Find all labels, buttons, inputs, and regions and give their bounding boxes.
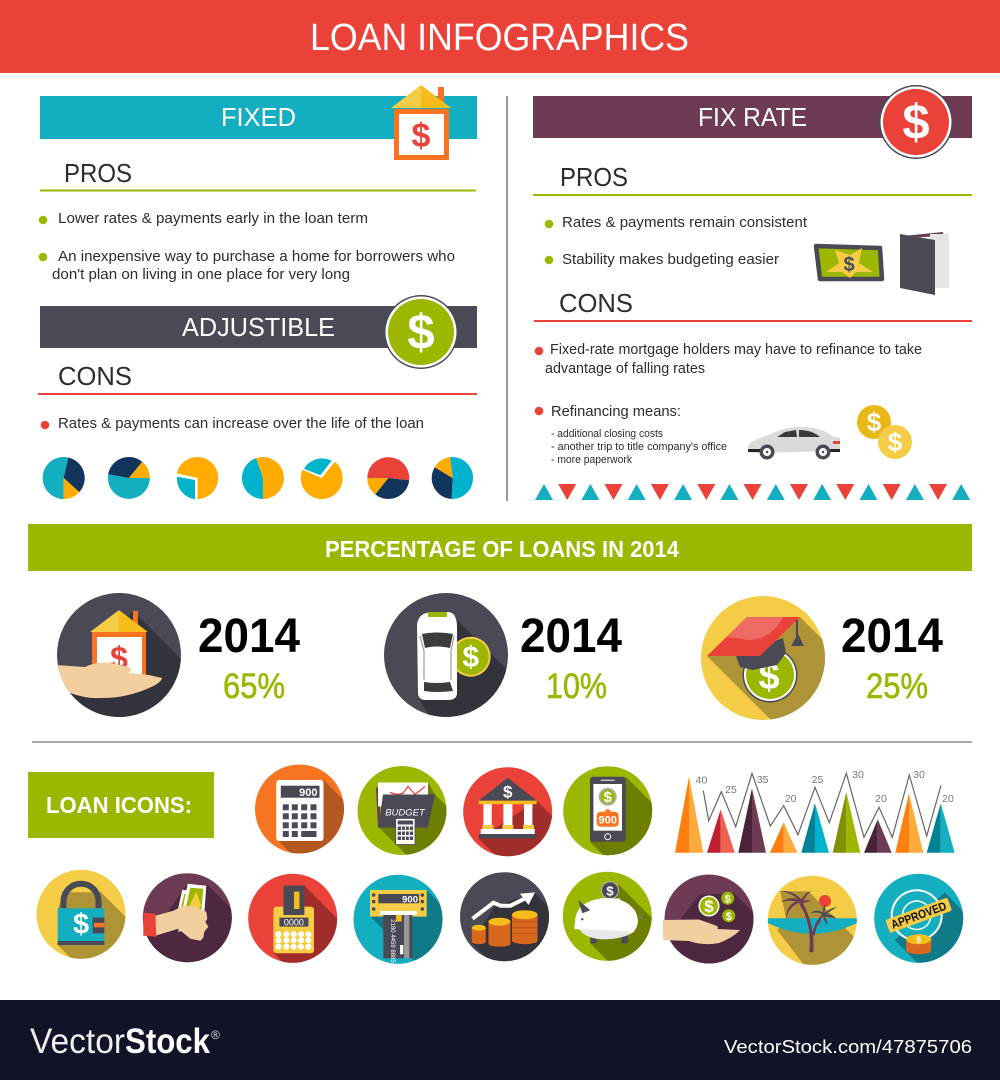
icon: banknote xyxy=(816,246,882,279)
heading: cons: CONS xyxy=(559,288,633,318)
stat: home loans xyxy=(57,593,300,717)
list: refinancing items: - additional closing costs xyxy=(551,428,663,440)
icon: green dollar coin: $ xyxy=(407,306,435,360)
pie 3 xyxy=(177,457,218,499)
list: fix rate pros: Rates & payments remain consistent xyxy=(562,214,808,231)
pie 5 xyxy=(301,458,343,499)
list: fixed pros xyxy=(39,210,455,283)
icon: card calculator xyxy=(248,874,338,963)
icon: green dollar coin xyxy=(384,295,458,369)
footer: watermark bar: Stock xyxy=(125,1022,210,1061)
list: refinancing items xyxy=(551,428,727,466)
triangle bunting xyxy=(535,484,970,500)
stat: car loans xyxy=(384,593,622,730)
icon: bank: $ xyxy=(503,783,513,802)
heading: fix rate: FIX RATE xyxy=(698,102,807,132)
icon: house in hand xyxy=(57,593,181,717)
icon: hand with coins: $ xyxy=(725,894,731,906)
chart: triangle peaks with line: 20 xyxy=(942,793,954,805)
heading: fixed: FIXED xyxy=(221,102,296,132)
panel: fixed xyxy=(39,85,477,283)
list: adjustible cons: Rates & payments can increase over the life of the loan xyxy=(58,415,424,432)
icon: red dollar coin xyxy=(879,85,953,159)
stat text: 65% xyxy=(223,667,285,706)
chart: triangle peaks with line: 30 xyxy=(852,769,864,781)
pie 6 xyxy=(367,457,409,499)
list: fixed pros: don't plan on living in one place for very long xyxy=(52,266,350,283)
icon: house in hand: $ xyxy=(110,640,128,676)
chart: triangle peaks with line: 25 xyxy=(812,774,823,786)
stat text xyxy=(841,610,943,706)
icon: piggy bank: $ xyxy=(606,883,614,898)
icon: smartphone: 900 xyxy=(599,815,617,827)
icon: budget folder: BUDGET xyxy=(385,808,426,818)
stat text: 10% xyxy=(546,667,607,706)
icon: atm card: 900 xyxy=(402,894,418,905)
pie 2 xyxy=(108,457,150,499)
icon: budget folder xyxy=(358,766,446,855)
list: fix rate cons: advantage of falling rates xyxy=(545,360,705,377)
heading: adjustible xyxy=(40,306,477,348)
heading: fix rate xyxy=(533,96,972,138)
stat text: 25% xyxy=(866,667,928,706)
icon: padlock: $ xyxy=(73,908,89,940)
icon: house xyxy=(391,85,451,160)
icon: piggy bank xyxy=(562,872,652,961)
icon: hand with coins: $ xyxy=(704,897,714,916)
footer: watermark bar: ® xyxy=(211,1028,220,1042)
heading: pros: PROS xyxy=(560,162,628,192)
title banner xyxy=(0,0,1000,73)
panel: fix rate xyxy=(533,85,972,500)
pie 1 xyxy=(43,457,85,499)
icon: approved stamp xyxy=(874,874,964,963)
icon: car with coin xyxy=(384,593,508,717)
section banner: percentage of loans xyxy=(28,524,972,571)
heading: pros: PROS xyxy=(64,158,132,188)
icon: approved stamp: APPROVED xyxy=(889,899,949,932)
pie 4 xyxy=(242,457,284,499)
footer: watermark bar: VectorStock.com/47875706 xyxy=(724,1037,972,1057)
icon: growth chart with coins xyxy=(460,872,549,962)
list: fixed pros: An inexpensive way to purchase a home for borrowers who xyxy=(58,248,455,265)
pie charts row xyxy=(43,457,473,499)
panel: adjustible xyxy=(38,295,477,499)
list: fix rate pros xyxy=(545,214,808,268)
icon: hand with coins: $ xyxy=(726,911,732,923)
label: loan icons xyxy=(28,772,214,838)
stat text xyxy=(198,610,300,706)
chart: triangle peaks with line: 25 xyxy=(725,784,737,796)
stat text: 2014 xyxy=(520,610,622,663)
chart: triangle peaks with line: 20 xyxy=(785,793,797,805)
icon: padlock xyxy=(36,870,126,959)
icon: car xyxy=(748,427,840,460)
icon: smartphone xyxy=(563,766,652,856)
icon: house: $ xyxy=(412,117,431,155)
icon: palm beach xyxy=(768,876,857,965)
heading: adjustible: ADJUSTIBLE xyxy=(182,312,335,342)
section banner: percentage of loans: PERCENTAGE OF LOANS IN 2014 xyxy=(325,536,679,562)
icon: atm card: 2180 4459 8885 xyxy=(389,919,395,963)
icon: hand with coins xyxy=(663,874,754,964)
list: fixed pros: Lower rates & payments early in the loan term xyxy=(58,210,368,227)
icon: calculator xyxy=(255,764,344,854)
heading: fixed xyxy=(40,96,477,139)
icon: bank xyxy=(463,767,552,856)
stat: student loans xyxy=(701,596,943,724)
chart: triangle peaks with line: 20 xyxy=(875,793,887,805)
icon: calculator: 900 xyxy=(299,787,318,799)
chart: triangle peaks with line xyxy=(675,769,955,853)
icon: car with coin: $ xyxy=(462,641,479,674)
icon: banknote: $ xyxy=(843,254,855,276)
stat text: 2014 xyxy=(841,610,943,663)
label: loan icons: LOAN ICONS: xyxy=(46,792,192,818)
stat text: 2014 xyxy=(198,610,300,663)
list: fix rate cons: Refinancing means: xyxy=(551,403,681,420)
icon: gold coins: $ xyxy=(888,427,903,457)
icon: hand holding cash xyxy=(142,873,232,962)
chart: triangle peaks with line: 30 xyxy=(913,769,925,781)
icon: gold coins: $ xyxy=(867,407,882,437)
list: refinancing items: - more paperwork xyxy=(551,454,632,466)
icon: booklet xyxy=(900,232,949,295)
icon: approved stamp: $ xyxy=(916,935,921,944)
footer: watermark bar: Vector xyxy=(30,1022,125,1061)
list: refinancing items: - another trip to title company's office xyxy=(551,441,727,453)
pie 7 xyxy=(432,457,473,499)
chart: triangle peaks with line: 40 xyxy=(696,774,707,786)
icon: atm card xyxy=(354,874,442,964)
icon: graduation cap with coin: $ xyxy=(758,656,780,698)
heading: cons: CONS xyxy=(58,361,132,391)
icon: red dollar coin: $ xyxy=(902,96,930,150)
footer: watermark bar xyxy=(0,1000,1000,1080)
list: fix rate cons xyxy=(535,341,922,420)
list: fix rate cons: Fixed-rate mortgage holders may have to refinance to take xyxy=(550,341,922,358)
icon: graduation cap with coin xyxy=(701,596,830,724)
icon: gold coins xyxy=(857,405,912,459)
icon: card calculator: 0000 xyxy=(284,917,304,927)
list: fix rate pros: Stability makes budgeting easier xyxy=(562,251,779,268)
icon: smartphone: $ xyxy=(604,789,613,806)
chart: triangle peaks with line: 35 xyxy=(757,774,769,786)
stat text xyxy=(520,610,622,706)
title banner: LOAN INFOGRAPHICS xyxy=(310,17,689,59)
